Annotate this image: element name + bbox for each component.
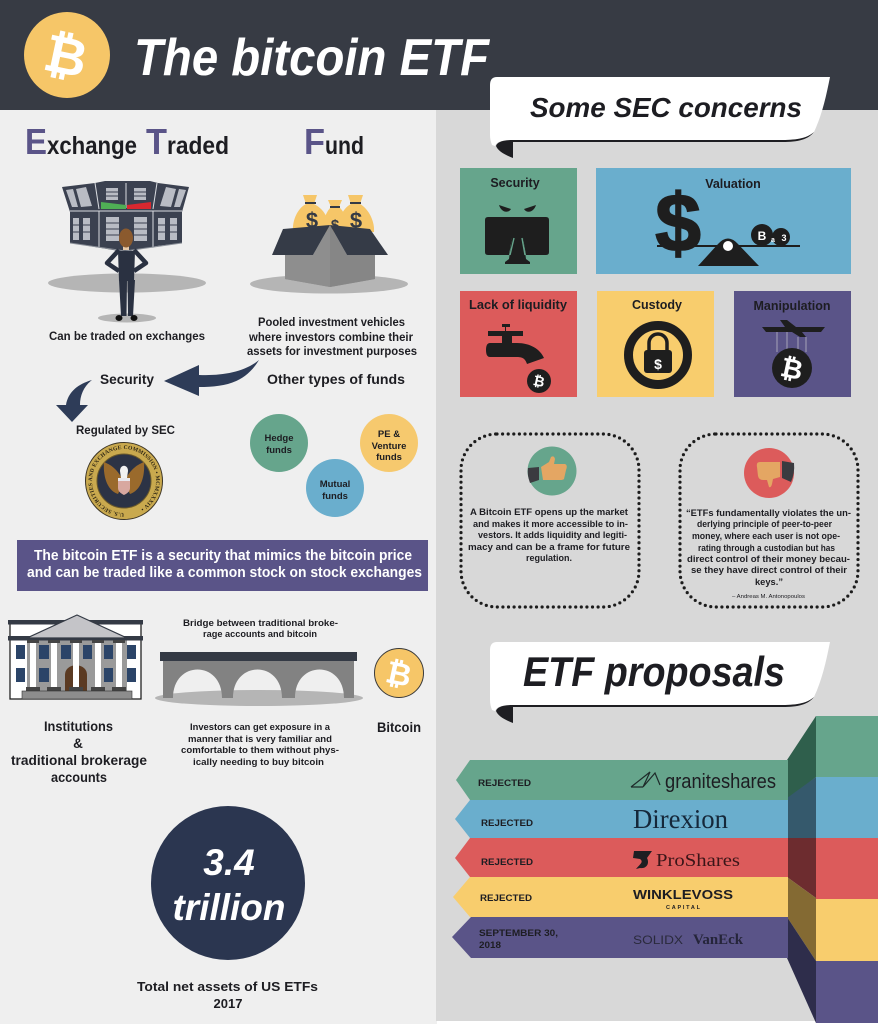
proposal: ProShares xyxy=(455,838,788,877)
proposal: Winklevoss: CAPITAL xyxy=(666,905,701,911)
proposal: Winklevoss xyxy=(453,877,788,917)
icon: bitcoin logo: ₿ xyxy=(39,23,93,90)
text: pooled investment vehicles: assets for investment purposes xyxy=(247,346,417,358)
text: total net assets: Total net assets of US ETFs xyxy=(137,979,318,994)
text: bridge between: Bridge between traditional broke- xyxy=(183,618,338,629)
tile: security xyxy=(460,168,577,274)
callout: definition banner: The bitcoin ETF is a security that mimics the bitcoin price xyxy=(34,548,412,564)
stat circle: 3.4 trillion xyxy=(151,806,305,960)
fund type circles xyxy=(250,414,418,517)
text: total net assets xyxy=(137,979,318,1011)
icon: thumbs down xyxy=(744,448,794,498)
header band xyxy=(0,0,878,110)
text: institutions: & xyxy=(73,736,83,751)
tile: custody: Custody xyxy=(632,298,682,312)
icon: box of money bags: $ xyxy=(331,217,340,234)
callout: pro argument: regulation. xyxy=(526,553,572,564)
circle: PE and venture funds xyxy=(360,414,418,472)
label: other types of funds: Other types of funds xyxy=(267,371,405,387)
tile: valuation: a xyxy=(771,237,775,244)
tile: valuation: $ xyxy=(655,178,701,269)
proposal: Solidx and VanEck: SOLIDX xyxy=(633,933,683,947)
callout: con argument: direct control of their money becau- xyxy=(687,554,850,565)
tile: custody: $ xyxy=(654,356,662,372)
circle: PE and venture funds: PE & xyxy=(378,429,400,440)
tile: manipulation: Manipulation xyxy=(753,299,831,313)
text: pooled investment vehicles: where investors combine their xyxy=(248,332,414,344)
tile: manipulation: ₿ xyxy=(778,352,806,387)
circle: hedge funds xyxy=(250,414,308,472)
text: institutions: traditional brokerage xyxy=(11,753,147,768)
proposal: graniteshares xyxy=(456,760,788,800)
callout: definition banner xyxy=(17,540,428,591)
icon: box of money bags xyxy=(250,195,408,294)
circle: PE and venture funds: funds xyxy=(376,452,402,463)
heading: Exchange Traded Fund: F xyxy=(304,121,325,162)
text: bridge between xyxy=(183,618,338,640)
ribbon: ETF proposals: ETF proposals xyxy=(523,648,785,695)
text: total net assets: 2017 xyxy=(214,996,242,1011)
text: institutions: accounts xyxy=(51,770,107,785)
proposal: ProShares: REJECTED xyxy=(481,857,533,868)
chart: proposal fold and side block xyxy=(787,716,878,1023)
circle: mutual funds: funds xyxy=(322,491,348,502)
tile: manipulation xyxy=(734,291,851,397)
callout: pro argument xyxy=(461,434,639,607)
label: regulated by SEC: Regulated by SEC xyxy=(76,425,175,437)
callout: con argument: rating through a custodian but has xyxy=(698,543,835,554)
tile: valuation: Valuation xyxy=(705,177,761,191)
icon: institution building xyxy=(8,615,143,699)
title: The bitcoin ETF xyxy=(134,29,490,87)
circle: hedge funds: funds xyxy=(266,445,292,456)
proposal: ProShares: ProShares xyxy=(656,850,740,870)
ribbon: Some SEC concerns: Some SEC concerns xyxy=(530,92,802,123)
text: can be traded: Can be traded on exchanges xyxy=(49,331,205,343)
panel: left background xyxy=(0,110,437,1024)
proposal: Winklevoss: WINKLEVOSS xyxy=(633,888,733,902)
heading: Exchange Traded Fund: xchange xyxy=(47,132,137,160)
callout: con argument: derlying principle of peer-to-peer xyxy=(697,519,832,530)
proposal: Solidx and VanEck: VanEck xyxy=(693,932,744,948)
ribbon: ETF proposals xyxy=(490,642,830,723)
text: investor exposure: Investors can get exposure in a xyxy=(190,722,331,733)
icon: trader at exchange board xyxy=(48,181,206,322)
callout: pro argument: A Bitcoin ETF opens up the market xyxy=(470,507,629,518)
proposal: Direxion xyxy=(455,800,788,838)
circle: PE and venture funds: Venture xyxy=(372,441,406,452)
text: pooled investment vehicles: Pooled investment vehicles xyxy=(258,317,405,329)
arrow: funds to security xyxy=(164,360,259,396)
circle: mutual funds xyxy=(306,459,364,517)
text: bridge between: rage accounts and bitcoin xyxy=(203,629,317,640)
tile: valuation xyxy=(596,168,851,274)
text: pooled investment vehicles xyxy=(247,317,417,358)
text: investor exposure: comfortable to them without phys- xyxy=(181,745,339,756)
stat circle: 3.4 trillion: trillion xyxy=(172,887,286,928)
icon: bridge xyxy=(155,652,363,706)
tile: lack of liquidity: ₿ xyxy=(532,373,546,391)
text: investor exposure: manner that is very familiar and xyxy=(188,734,332,745)
text: institutions: Institutions xyxy=(44,719,113,734)
proposal: Solidx and VanEck: SEPTEMBER 30, xyxy=(479,928,558,939)
icon: bitcoin logo xyxy=(24,12,110,98)
heading: Exchange Traded Fund: raded xyxy=(167,132,229,160)
circle: mutual funds: Mutual xyxy=(320,479,350,490)
proposal: Direxion: REJECTED xyxy=(481,818,533,829)
icon: bitcoin coin: ₿ xyxy=(383,654,415,695)
label: Security: Security xyxy=(100,371,154,387)
arrow: security to SEC xyxy=(56,380,92,422)
proposal: graniteshares: graniteshares xyxy=(665,771,776,793)
callout: pro argument: macy and can be a frame for future xyxy=(468,542,630,553)
text: investor exposure: ically needing to buy bitcoin xyxy=(193,757,324,768)
icon: thumbs up xyxy=(528,446,576,496)
proposal: graniteshares: REJECTED xyxy=(478,778,531,789)
proposal: Direxion: Direxion xyxy=(633,804,728,834)
icon: box of money bags: $ xyxy=(306,208,318,233)
stat circle: 3.4 trillion: 3.4 xyxy=(203,842,255,883)
proposal: Solidx and VanEck xyxy=(452,917,788,958)
callout: con argument: – Andreas M. Antonopoulos xyxy=(732,594,805,600)
callout: con argument: “ETFs fundamentally violates the un- xyxy=(686,508,851,519)
heading: Exchange Traded Fund: und xyxy=(325,132,364,160)
panel: right background xyxy=(436,110,878,1021)
heading: Exchange Traded Fund: E xyxy=(25,121,47,162)
tile: lack of liquidity: Lack of liquidity xyxy=(469,298,567,312)
icon: box of money bags: $ xyxy=(350,208,362,233)
heading: Exchange Traded Fund: T xyxy=(146,121,167,162)
tile: valuation: 3 xyxy=(781,233,787,243)
heading: Exchange Traded Fund xyxy=(25,121,364,162)
text: institutions xyxy=(11,719,147,785)
ribbon: Some SEC concerns xyxy=(490,77,830,158)
tile: security: Security xyxy=(490,176,540,190)
tile: custody xyxy=(597,291,714,397)
callout: con argument: money, where each user is not ope- xyxy=(692,531,840,542)
callout: con argument: se they have direct control of their xyxy=(691,565,847,576)
callout: con argument xyxy=(680,434,858,607)
callout: pro argument: vestors. It adds liquidity and legiti- xyxy=(478,530,627,541)
callout: con argument: keys.” xyxy=(755,577,783,588)
icon: SEC seal: U.S. SECURITIES AND EXCHANGE COMMISSION • MCMXXXIV • xyxy=(88,445,160,517)
proposal: Solidx and VanEck: 2018 xyxy=(479,940,501,951)
proposal: Winklevoss: REJECTED xyxy=(480,893,532,904)
label: Bitcoin: Bitcoin xyxy=(377,720,421,735)
callout: pro argument: and makes it more accessible to in- xyxy=(473,519,628,530)
circle: hedge funds: Hedge xyxy=(264,433,294,444)
tile: lack of liquidity xyxy=(460,291,577,397)
callout: definition banner: and can be traded like a common stock on stock exchanges xyxy=(27,565,422,581)
icon: bitcoin coin xyxy=(374,648,424,698)
text: investor exposure xyxy=(181,722,339,768)
tile: valuation: B xyxy=(758,229,767,243)
